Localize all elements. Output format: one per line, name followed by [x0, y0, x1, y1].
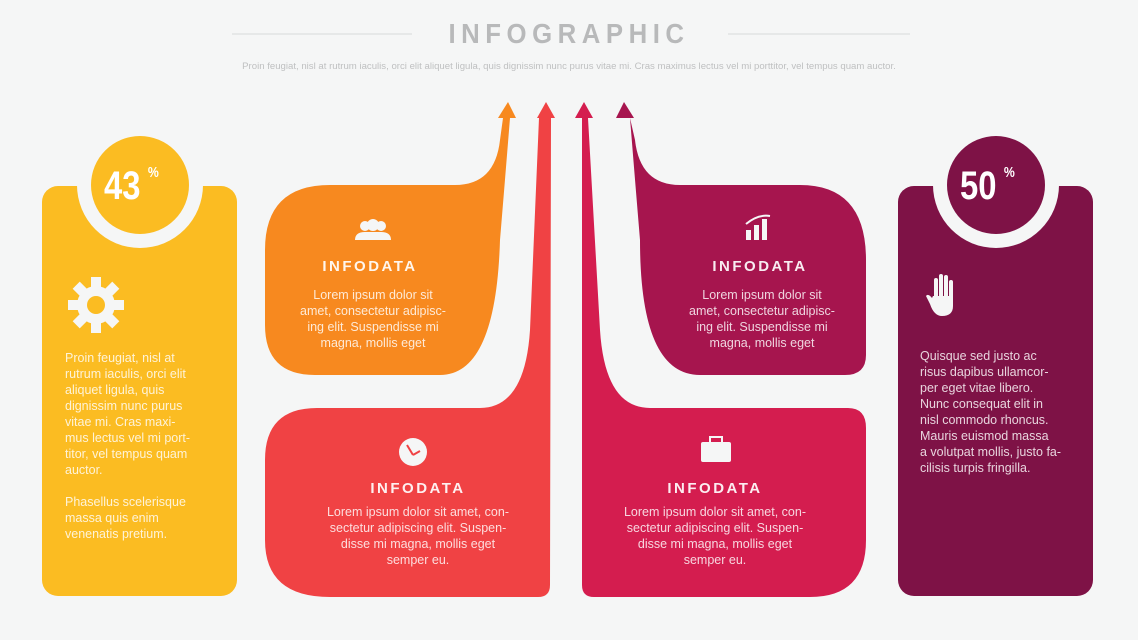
stat: 50%: 50 %	[960, 164, 1015, 208]
text: purple: risus dapibus ullamcor-	[920, 365, 1049, 379]
panel: red	[265, 102, 555, 597]
text: orange: magna, mollis eget	[321, 336, 425, 350]
text: red	[327, 505, 509, 567]
icon: clock	[399, 438, 427, 466]
text: orange: amet, consectetur adipisc-	[300, 304, 446, 318]
icon: hand	[926, 274, 953, 316]
subtitle: Proin feugiat, nisl at rutrum iaculis, orci elit aliquet ligula, quis dignissim nunc purus vitae mi. Cras maximus lectus vel mi porttitor, vel tempus quam auctor.	[242, 61, 896, 72]
icon: chart	[746, 216, 770, 240]
text: purple: nisl commodo rhoncus.	[920, 413, 1049, 427]
text: red: disse mi magna, mollis eget	[341, 537, 495, 551]
text: orange: ing elit. Suspendisse mi	[307, 320, 439, 334]
panel: orange	[265, 102, 516, 375]
text: crimson: Lorem ipsum dolor sit amet, con-	[624, 505, 806, 519]
text: yellow: auctor.	[65, 463, 103, 477]
text: orange: Lorem ipsum dolor sit	[313, 288, 433, 302]
text: magenta: Lorem ipsum dolor sit	[702, 288, 822, 302]
text: purple: per eget vitae libero.	[920, 381, 1033, 395]
heading: red: INFODATA	[370, 480, 466, 497]
heading: orange: INFODATA	[322, 258, 418, 275]
text: magenta: ing elit. Suspendisse mi	[696, 320, 828, 334]
panel: yellow	[42, 110, 237, 596]
title: INFOGRAPHIC	[448, 18, 690, 49]
panel: crimson	[575, 102, 866, 597]
text: yellow: mus lectus vel mi port-	[65, 431, 190, 445]
icon: briefcase	[701, 437, 731, 462]
text: purple: cilisis turpis fringilla.	[920, 461, 1030, 475]
text: crimson	[624, 505, 806, 567]
heading: magenta: INFODATA	[712, 258, 808, 275]
text: yellow: massa quis enim	[65, 511, 159, 525]
stat: 43%: 43 %	[104, 164, 159, 208]
text: yellow: vitae mi. Cras maxi-	[65, 415, 175, 429]
text: yellow: venenatis pretium.	[65, 527, 167, 541]
text: crimson: disse mi magna, mollis eget	[638, 537, 792, 551]
text: yellow: titor, vel tempus quam	[65, 447, 187, 461]
text: yellow: dignissim nunc purus	[65, 399, 182, 413]
text: yellow: Phasellus scelerisque	[65, 495, 186, 509]
text: yellow	[65, 351, 190, 541]
text: red: Lorem ipsum dolor sit amet, con-	[327, 505, 509, 519]
panel: magenta	[616, 102, 866, 375]
text: magenta	[689, 288, 835, 350]
text: purple: Quisque sed justo ac	[920, 349, 1037, 363]
text: magenta: magna, mollis eget	[710, 336, 814, 350]
text: purple: Nunc consequat elit in	[920, 397, 1043, 411]
text: magenta: amet, consectetur adipisc-	[689, 304, 835, 318]
text: crimson: semper eu.	[684, 553, 746, 567]
text: yellow: rutrum iaculis, orci elit	[65, 367, 186, 381]
icon: people	[355, 219, 391, 240]
text: crimson: sectetur adipiscing elit. Suspen-	[627, 521, 803, 535]
text: purple: a volutpat mollis, justo fa-	[920, 445, 1061, 459]
text: yellow: Proin feugiat, nisl at	[65, 351, 175, 365]
text: orange	[300, 288, 446, 350]
text: purple	[920, 349, 1061, 475]
text: yellow: aliquet ligula, quis	[65, 383, 164, 397]
text: red: sectetur adipiscing elit. Suspen-	[330, 521, 506, 535]
icon: gear	[68, 277, 124, 333]
heading: crimson: INFODATA	[667, 480, 763, 497]
panel: purple	[898, 110, 1093, 596]
text: red: semper eu.	[387, 553, 449, 567]
text: purple: Mauris euismod massa	[920, 429, 1049, 443]
